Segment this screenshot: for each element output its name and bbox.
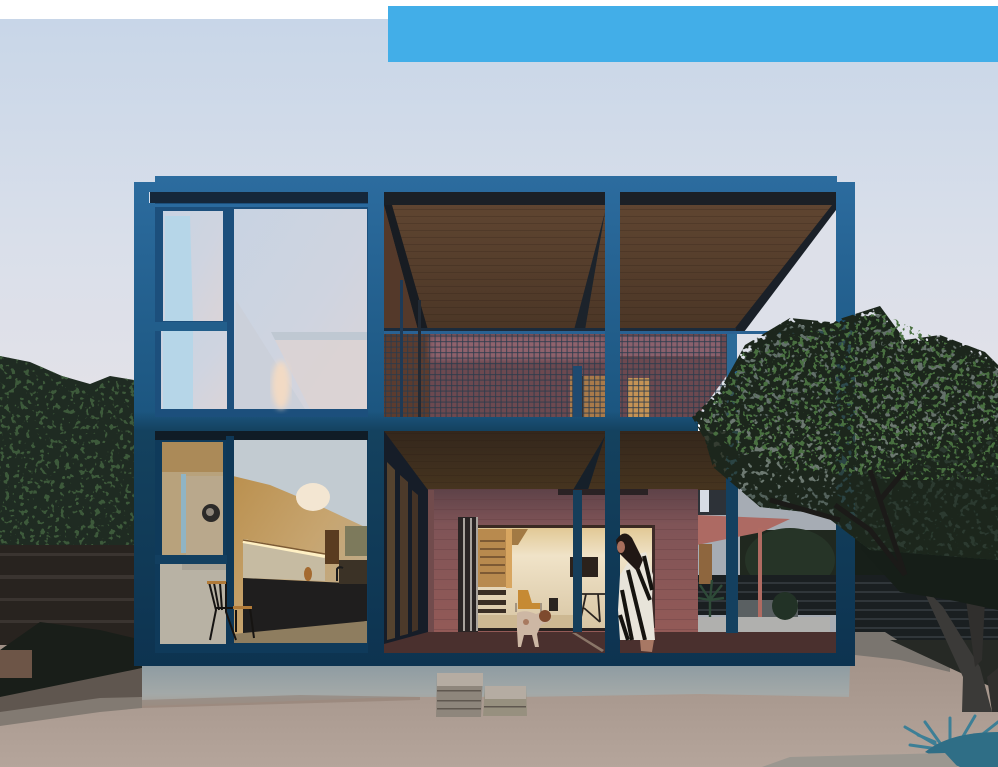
- left hedge and fence: [0, 356, 142, 726]
- lower bay: [384, 431, 836, 653]
- pendant lamp: [296, 483, 330, 511]
- dining table: [580, 594, 605, 622]
- upper left window panes: [148, 192, 368, 417]
- interior room: [478, 525, 655, 631]
- wood ceiling: [384, 205, 836, 330]
- foundation: [142, 666, 850, 708]
- folded door: [458, 517, 478, 632]
- woman in striped dress: [616, 533, 655, 652]
- pane: kitchen: [233, 440, 367, 643]
- right fence, terraced steps: [697, 480, 998, 690]
- textured crown: [692, 306, 998, 560]
- chair: [209, 582, 254, 640]
- curtain reflection: [165, 216, 193, 321]
- concrete curb: [762, 753, 958, 767]
- background behind lower right bay: [697, 488, 857, 633]
- pane: art wall: [162, 442, 223, 555]
- dark crown mass: [858, 420, 998, 610]
- middle post: [573, 490, 582, 632]
- wall art / tv: [570, 557, 598, 577]
- left folding doors: [384, 431, 428, 644]
- leaf highlights: [700, 312, 998, 480]
- pink siding wall: [428, 489, 698, 632]
- window mullions: [226, 436, 234, 644]
- stacked paving steps: [436, 673, 527, 717]
- mesh railing: [384, 334, 605, 417]
- blue agave plants: [905, 716, 998, 767]
- pane: chair wall: [160, 564, 226, 644]
- blue header banner: [388, 6, 998, 62]
- stairs: [478, 529, 507, 587]
- trunk: [920, 583, 992, 712]
- wall window: [325, 530, 339, 564]
- tree: [692, 306, 998, 712]
- deck: [384, 632, 836, 653]
- limbs: [770, 470, 905, 575]
- pane: large right: [234, 209, 367, 409]
- orange chair: [518, 590, 540, 609]
- floor: [233, 621, 367, 643]
- ceiling beams: [574, 212, 605, 330]
- sky: [0, 19, 998, 419]
- pane: tall left: [163, 211, 223, 321]
- steel frame: [134, 176, 855, 666]
- back wall behind mesh: [384, 333, 727, 417]
- upper balcony: [384, 192, 836, 417]
- base cabinets: [243, 578, 367, 634]
- lower ceiling: [384, 431, 726, 490]
- crown shade under leaves: [700, 314, 998, 560]
- sky through upper bay: [620, 205, 836, 417]
- backsplash with under-cabinet light: [243, 542, 325, 581]
- lower left window panes: [148, 431, 368, 653]
- ground: [0, 640, 998, 767]
- dog: [517, 610, 552, 647]
- pane: small left: [161, 331, 227, 409]
